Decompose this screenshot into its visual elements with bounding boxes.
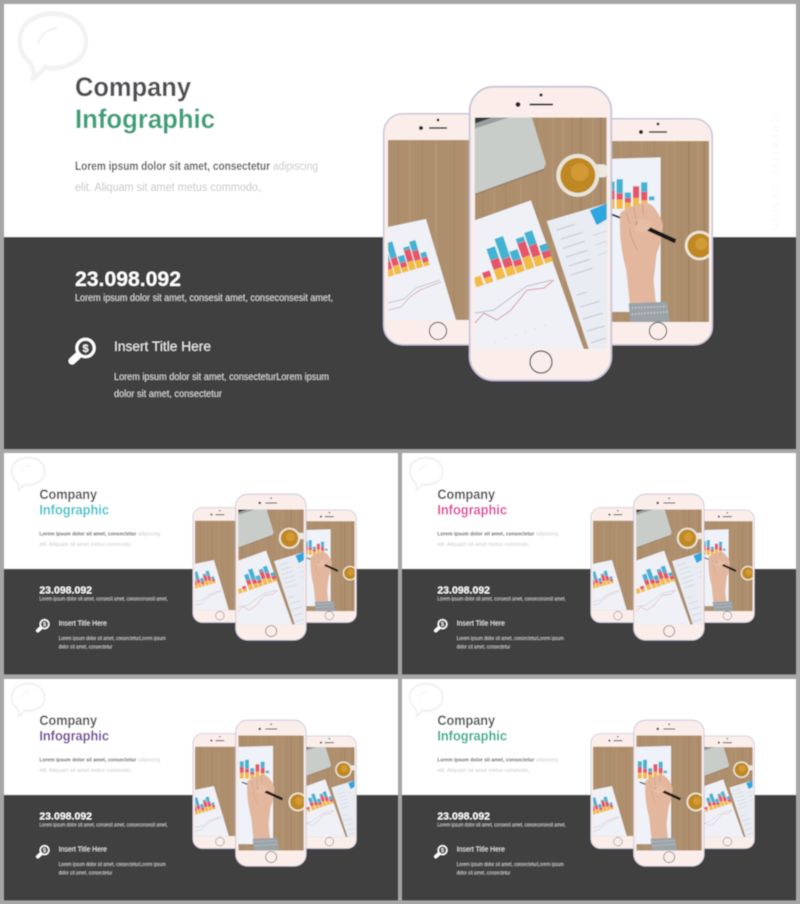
sub-heading and body: Insert Title Here [457, 847, 505, 854]
intro text [75, 161, 318, 194]
icon: magnifier with dollar [38, 846, 49, 857]
title [437, 487, 507, 518]
key number [39, 585, 168, 603]
icon: speech bubble watermark [410, 684, 443, 716]
sub-heading and body: Lorem ipsum dolor sit amet, consecteturLorem ipsum [59, 636, 166, 642]
sub-heading and body: dolor sit amet, consectetur [457, 871, 511, 877]
title: Company [75, 72, 191, 102]
sub-heading and body: Lorem ipsum dolor sit amet, consecteturLorem ipsum [457, 636, 564, 642]
key number: Lorem ipsum dolor sit amet, consesit amet, conseconsesit amet, [437, 597, 566, 603]
panel: white upper area [402, 679, 796, 795]
key number: 23.098.092 [437, 811, 490, 822]
intro text [437, 758, 558, 774]
key number: 23.098.092 [437, 585, 490, 596]
slide 3: pink variant [402, 453, 796, 674]
key number: Lorem ipsum dolor sit amet, consesit amet, conseconsesit amet, [437, 823, 566, 829]
phones with desk photos [589, 720, 754, 866]
sub-heading and body: Lorem ipsum dolor sit amet, consecteturLorem ipsum [114, 371, 329, 383]
phones with desk photos [379, 87, 714, 380]
key number: Lorem ipsum dolor sit amet, consesit amet, conseconsesit amet, [39, 823, 168, 829]
key number: Lorem ipsum dolor sit amet, consesit amet, conseconsesit amet, [39, 597, 168, 603]
title: Infographic [39, 729, 109, 744]
key number [437, 585, 566, 603]
title [437, 713, 507, 744]
sub-heading and body: Lorem ipsum dolor sit amet, consecteturLorem ipsum [457, 862, 564, 868]
sub-heading and body: dolor sit amet, consectetur [114, 388, 222, 400]
key number [39, 811, 168, 829]
intro text: Lorem ipsum dolor sit amet, consectetur [39, 758, 137, 764]
icon: speech bubble watermark [410, 458, 443, 490]
title [75, 72, 215, 134]
sub-heading and body [114, 338, 329, 400]
intro text: adipiscing [273, 161, 318, 173]
sub-heading and body [59, 847, 166, 877]
intro text: elit. Aliquam sit amet metus commodo, [437, 768, 530, 774]
phones with desk photos [191, 720, 356, 866]
icon: magnifier with dollar [436, 620, 447, 631]
title [39, 713, 109, 744]
title: Infographic [437, 729, 507, 744]
intro text: adipiscing [536, 532, 558, 538]
intro text [437, 532, 558, 548]
title: Company [39, 487, 98, 502]
key number [437, 811, 566, 829]
sub-heading and body [59, 621, 166, 651]
icon: speech bubble watermark [12, 684, 45, 716]
phones with desk photos [191, 494, 357, 640]
icon: magnifier with dollar: $ [43, 848, 46, 854]
icon: magnifier with dollar: $ [441, 622, 444, 628]
key number: 23.098.092 [75, 268, 181, 291]
sub-heading and body [457, 621, 564, 651]
icon: magnifier with dollar [436, 846, 447, 857]
sub-heading and body: dolor sit amet, consectetur [59, 645, 113, 651]
intro text: adipiscing [138, 532, 160, 538]
icon: magnifier with dollar: $ [82, 343, 89, 355]
title: Infographic [39, 503, 109, 518]
sub-heading and body: Insert Title Here [114, 338, 211, 354]
phones with desk photos [589, 494, 755, 640]
key number: Lorem ipsum dolor sit amet, consesit amet, conseconsesit amet, [75, 292, 333, 304]
sub-heading and body: Insert Title Here [59, 847, 107, 854]
key number: 23.098.092 [39, 585, 92, 596]
intro text: adipiscing [536, 758, 558, 764]
panel: dark lower band [4, 795, 398, 900]
title [39, 487, 109, 518]
intro text: Lorem ipsum dolor sit amet, consectetur [39, 532, 137, 538]
panel: white upper area [4, 679, 398, 795]
intro text: Lorem ipsum dolor sit amet, consectetur [437, 532, 535, 538]
panel: white upper area [402, 453, 796, 569]
title: Company [437, 487, 496, 502]
icon: magnifier with dollar [38, 620, 49, 631]
title: Company [39, 713, 98, 728]
icon: speech bubble watermark [12, 458, 45, 490]
key number [75, 268, 333, 304]
panel: dark lower band [402, 569, 796, 674]
intro text [39, 758, 160, 774]
intro text [39, 532, 160, 548]
title: Company [437, 713, 496, 728]
sub-heading and body [457, 847, 564, 877]
icon: speech bubble watermark [20, 13, 86, 78]
icon: magnifier with dollar: $ [43, 622, 46, 628]
intro text: elit. Aliquam sit amet metus commodo, [39, 542, 132, 548]
sub-heading and body: Insert Title Here [59, 621, 107, 628]
intro text: adipiscing [138, 758, 160, 764]
panel: dark lower band [4, 237, 796, 449]
vertical watermark text: CREATIVE DESIGN [769, 116, 780, 232]
intro text: elit. Aliquam sit amet metus commodo, [437, 542, 530, 548]
panel: dark lower band [402, 795, 796, 900]
panel: white upper area [4, 453, 398, 569]
slide 5: teal variant [402, 679, 796, 900]
sub-heading and body: dolor sit amet, consectetur [457, 645, 511, 651]
icon: magnifier with dollar: $ [441, 848, 444, 854]
sub-heading and body: dolor sit amet, consectetur [59, 871, 113, 877]
title: Infographic [437, 503, 507, 518]
slide 2: cyan variant [4, 453, 398, 674]
slide 4: purple variant [4, 679, 398, 900]
intro text: elit. Aliquam sit amet metus commodo, [39, 768, 132, 774]
panel: white upper area [4, 4, 796, 237]
sub-heading and body: Lorem ipsum dolor sit amet, consecteturLorem ipsum [59, 862, 166, 868]
intro text: elit. Aliquam sit amet metus commodo, [75, 182, 261, 194]
intro text: Lorem ipsum dolor sit amet, consectetur [75, 161, 270, 173]
key number: 23.098.092 [39, 811, 92, 822]
sub-heading and body: Insert Title Here [457, 621, 505, 628]
slide 1: main green variant [4, 4, 796, 449]
title: Infographic [75, 104, 215, 134]
intro text: Lorem ipsum dolor sit amet, consectetur [437, 758, 535, 764]
panel: dark lower band [4, 569, 398, 674]
icon: magnifier with dollar [72, 339, 94, 361]
